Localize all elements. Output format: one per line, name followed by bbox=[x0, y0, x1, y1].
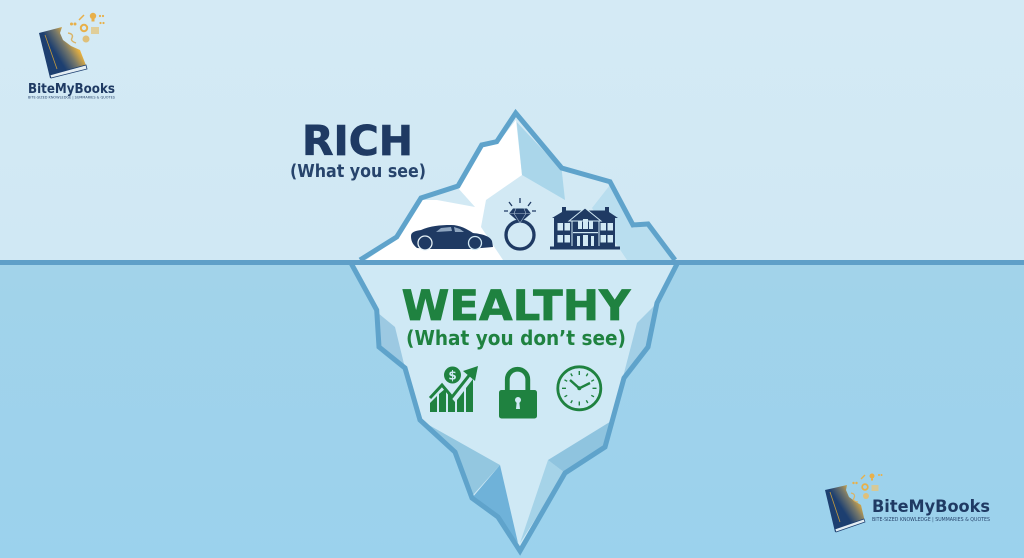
chart bbox=[91, 27, 99, 34]
logo: bottom right bbox=[825, 474, 990, 532]
swirl bbox=[68, 33, 76, 43]
quotes right bbox=[99, 15, 101, 17]
icon: car bbox=[411, 225, 493, 250]
iceberg above water bbox=[360, 113, 675, 260]
subheading: what you see: (What you see) bbox=[290, 162, 426, 182]
icon: padlock bbox=[499, 369, 537, 418]
heading: RICH: RICH bbox=[302, 117, 413, 165]
iceberg below water bbox=[352, 264, 677, 551]
brain bbox=[863, 493, 869, 499]
bulb bbox=[90, 13, 96, 19]
logo tagline: BITE-SIZED KNOWLEDGE | SUMMARIES & QUOTES bbox=[872, 517, 990, 523]
gear bbox=[862, 484, 868, 490]
swirl bbox=[851, 493, 858, 502]
quote left bbox=[70, 22, 73, 26]
logo book bbox=[39, 27, 87, 78]
icon: diamond ring bbox=[504, 198, 536, 249]
bulb bbox=[870, 474, 874, 478]
subheading: what you don't see: (What you don’t see) bbox=[406, 326, 626, 350]
chart bbox=[872, 485, 878, 491]
gear bbox=[81, 25, 87, 31]
brain bbox=[82, 36, 90, 42]
quotes right bbox=[878, 474, 880, 476]
quote left bbox=[852, 482, 855, 484]
logo: top left bbox=[28, 13, 115, 99]
icon: growth chart with coin: $ bbox=[448, 368, 457, 382]
logo wordmark: BiteMyBooks bbox=[28, 82, 115, 97]
heading: WEALTHY: WEALTHY bbox=[402, 281, 631, 330]
logo book bbox=[825, 485, 865, 532]
logo knowledge icons bbox=[851, 474, 882, 502]
logo wordmark: BiteMyBooks bbox=[872, 497, 990, 516]
icon: growth chart with coin bbox=[430, 366, 478, 412]
wrench bbox=[79, 15, 84, 20]
icon: clock bbox=[558, 367, 601, 410]
sky background bbox=[0, 0, 1024, 262]
waterline bbox=[0, 260, 1024, 265]
wrench bbox=[861, 475, 865, 479]
water background bbox=[0, 262, 1024, 558]
logo knowledge icons bbox=[68, 13, 105, 43]
logo tagline: BITE-SIZED KNOWLEDGE | SUMMARIES & QUOTES bbox=[28, 96, 115, 100]
icon: mansion bbox=[550, 207, 620, 250]
